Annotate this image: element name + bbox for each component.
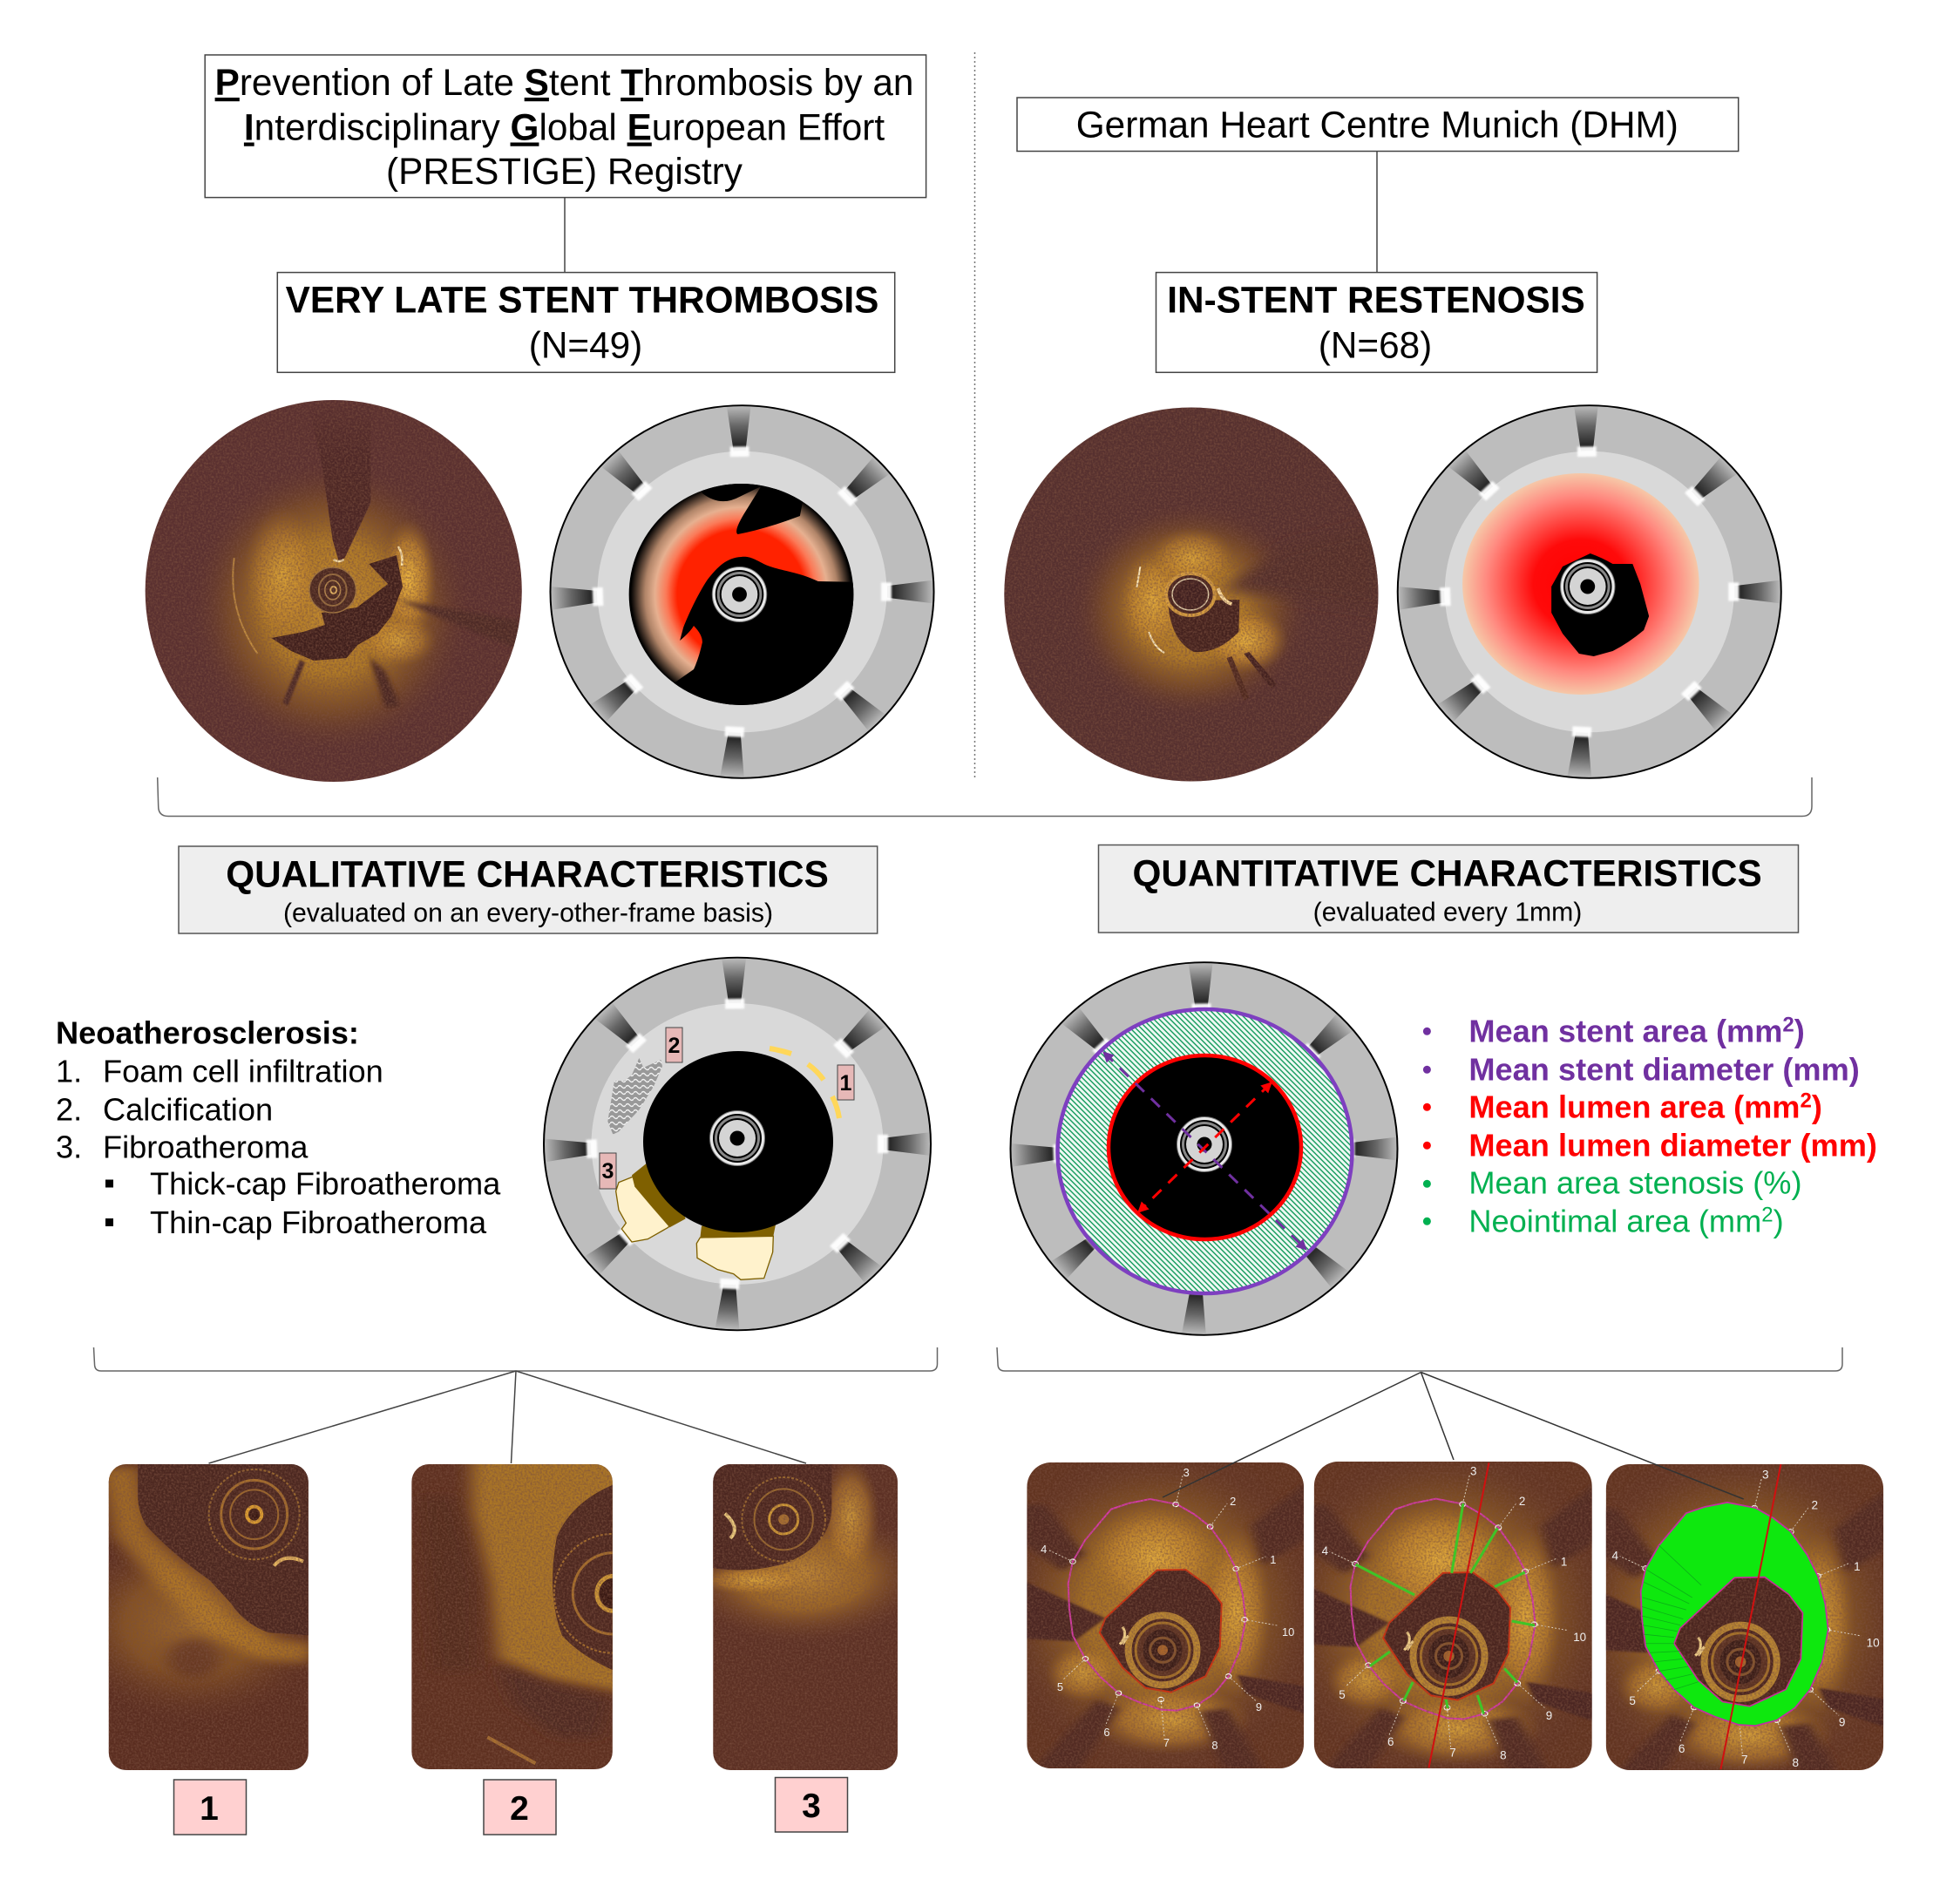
heading box: qualitative characteristics: QUALITATIVE CHARACTERISTICS: [226, 853, 829, 894]
text block: quantitative measures list: 2: [1761, 1203, 1773, 1226]
OCT frame: radial strut-to-lumen distances: 1: [1561, 1556, 1567, 1569]
title box: PRESTIGE registry: Interdisciplinary Global European Effort: [244, 106, 885, 148]
text block: neoatherosclerosis list: 2.: [56, 1091, 82, 1127]
text block: quantitative measures list: Mean stent area (mm: [1468, 1013, 1782, 1048]
OCT frame: stent and lumen contours with labels: 1: [1270, 1553, 1276, 1566]
OCT frame: neointimal area in green: 2: [1812, 1498, 1818, 1511]
text block: quantitative measures list: Mean lumen area (mm: [1468, 1089, 1800, 1124]
OCT frame: radial strut-to-lumen distances: 4: [1322, 1544, 1329, 1557]
OCT frame: neointimal area in green: 10: [1867, 1637, 1880, 1650]
OCT frame: radial strut-to-lumen distances: 7: [1449, 1747, 1456, 1760]
OCT frame: stent and lumen contours with labels: 2: [1230, 1495, 1236, 1508]
OCT frame: stent and lumen contours with labels: 4: [1041, 1543, 1047, 1556]
text block: neoatherosclerosis list: [56, 1014, 501, 1240]
heading box: qualitative characteristics: (evaluated on an every-other-frame basis): [283, 899, 773, 927]
text block: neoatherosclerosis list: Thick-cap Fibroatheroma: [150, 1165, 501, 1201]
OCT frame: radial strut-to-lumen distances: 8: [1500, 1749, 1507, 1762]
schematic: neoatherosclerosis components: 3: [602, 1159, 614, 1184]
text block: quantitative measures list: ): [1794, 1013, 1805, 1048]
vertical dotted divider: [974, 52, 976, 777]
OCT frame: stent and lumen contours with labels: 5: [1057, 1680, 1063, 1693]
OCT frame: stent and lumen contours with labels: 8: [1211, 1739, 1217, 1752]
bracket: lower left brace: [94, 1347, 938, 1371]
OCT frame: neointimal area in green: 1: [1854, 1560, 1861, 1573]
heading box: very late stent thrombosis: [277, 273, 895, 372]
title box: PRESTIGE registry: Prevention of Late Stent Thrombosis by an: [215, 62, 913, 103]
text block: quantitative measures list: ): [1773, 1203, 1784, 1238]
OCT frame: radial strut-to-lumen distances: 5: [1339, 1688, 1346, 1701]
schematic: neoatherosclerosis components: 1: [840, 1071, 852, 1096]
fan lines: brace to OCT crops: [209, 1371, 806, 1463]
bracket: lower right brace: [997, 1347, 1842, 1371]
schematic: thrombus in stent: [550, 405, 934, 778]
OCT crop 2: calcification: [411, 1464, 613, 1769]
OCT frame: stent and lumen contours with labels: 6: [1103, 1726, 1110, 1739]
OCT frame: stent and lumen contours with labels: 9: [1256, 1700, 1262, 1713]
schematic: neoatherosclerosis components: [544, 958, 931, 1331]
text block: quantitative measures list: Neointimal area (mm: [1468, 1203, 1761, 1238]
schematic: neointima in restenosis: [1397, 405, 1781, 778]
OCT frame: neointimal area in green: 8: [1793, 1756, 1799, 1769]
OCT frame: radial strut-to-lumen distances: 9: [1546, 1709, 1552, 1722]
heading box: quantitative characteristics: [1098, 845, 1799, 933]
fan lines: brace to OCT frames: [1163, 1372, 1744, 1499]
schematic: quantitative measurements: [1010, 962, 1398, 1335]
text block: quantitative measures list: [1423, 1013, 1877, 1238]
connector: registry to very late stent thrombosis: [564, 198, 566, 273]
OCT frame: neointimal area in green: 5: [1629, 1694, 1636, 1707]
OCT frame: neointimal area in green: [1605, 1464, 1884, 1770]
bracket: upper brace: [158, 777, 1812, 816]
title box: PRESTIGE registry: [205, 55, 926, 198]
heading box: quantitative characteristics: QUANTITATIVE CHARACTERISTICS: [1133, 852, 1762, 893]
text block: quantitative measures list: Mean lumen diameter (mm): [1468, 1127, 1877, 1163]
title box: German Heart Centre Munich: German Heart Centre Munich (DHM): [1076, 105, 1679, 145]
number labels under OCT crops: 3: [802, 1788, 821, 1825]
title box: PRESTIGE registry: (PRESTIGE) Registry: [386, 151, 743, 192]
heading box: quantitative characteristics: (evaluated every 1mm): [1313, 898, 1582, 926]
heading box: very late stent thrombosis: (N=49): [529, 324, 642, 366]
connector: DHM to in-stent restenosis: [1376, 152, 1378, 273]
OCT frame: stent and lumen contours with labels: [1027, 1462, 1304, 1768]
OCT frame: neointimal area in green: 6: [1679, 1742, 1685, 1755]
text block: neoatherosclerosis list: Foam cell infiltration: [103, 1053, 383, 1089]
OCT frame: radial strut-to-lumen distances: 10: [1573, 1631, 1586, 1644]
OCT image: very late stent thrombosis: [139, 392, 528, 789]
OCT frame: neointimal area in green: 7: [1741, 1754, 1748, 1767]
OCT frame: stent and lumen contours with labels: 10: [1282, 1625, 1294, 1639]
heading box: qualitative characteristics: [179, 846, 878, 933]
text block: quantitative measures list: Mean area stenosis (%): [1468, 1164, 1802, 1201]
heading box: in-stent restenosis: (N=68): [1319, 324, 1432, 366]
title box: German Heart Centre Munich: [1017, 98, 1739, 152]
text block: neoatherosclerosis list: 1.: [56, 1053, 82, 1089]
text block: quantitative measures list: Mean stent diameter (mm): [1468, 1051, 1860, 1087]
OCT crop 3: fibroatheroma: [713, 1464, 898, 1770]
text block: neoatherosclerosis list: 3.: [56, 1129, 82, 1164]
schematic: neoatherosclerosis components: 2: [668, 1034, 680, 1058]
OCT image: in-stent restenosis: [998, 401, 1387, 789]
OCT frame: neointimal area in green: 3: [1762, 1469, 1769, 1482]
number labels under OCT crops: 1: [200, 1790, 219, 1828]
heading box: in-stent restenosis: [1156, 273, 1597, 372]
number labels under OCT crops: [174, 1778, 847, 1835]
OCT crop 1: foam cell infiltration: [108, 1464, 309, 1770]
heading box: in-stent restenosis: IN-STENT RESTENOSIS: [1167, 279, 1585, 321]
OCT frame: neointimal area in green: 4: [1612, 1549, 1618, 1562]
OCT frame: radial strut-to-lumen distances: [1314, 1462, 1592, 1768]
number labels under OCT crops: 2: [510, 1790, 529, 1828]
OCT frame: radial strut-to-lumen distances: 3: [1470, 1464, 1477, 1478]
OCT frame: neointimal area in green: 9: [1839, 1715, 1845, 1728]
text block: quantitative measures list: 2: [1782, 1013, 1794, 1036]
OCT frame: radial strut-to-lumen distances: 6: [1387, 1735, 1394, 1748]
heading box: very late stent thrombosis: VERY LATE STENT THROMBOSIS: [286, 279, 878, 321]
text block: quantitative measures list: ): [1812, 1089, 1822, 1124]
text block: quantitative measures list: 2: [1800, 1089, 1812, 1112]
OCT frame: radial strut-to-lumen distances: 2: [1519, 1495, 1525, 1508]
text block: neoatherosclerosis list: Neoatherosclerosis:: [56, 1014, 359, 1050]
text block: neoatherosclerosis list: Calcification: [103, 1091, 273, 1127]
text block: neoatherosclerosis list: Thin-cap Fibroatheroma: [150, 1204, 487, 1240]
text block: neoatherosclerosis list: Fibroatheroma: [103, 1129, 309, 1164]
OCT frame: stent and lumen contours with labels: 7: [1163, 1736, 1170, 1749]
OCT frame: stent and lumen contours with labels: 3: [1183, 1466, 1190, 1479]
